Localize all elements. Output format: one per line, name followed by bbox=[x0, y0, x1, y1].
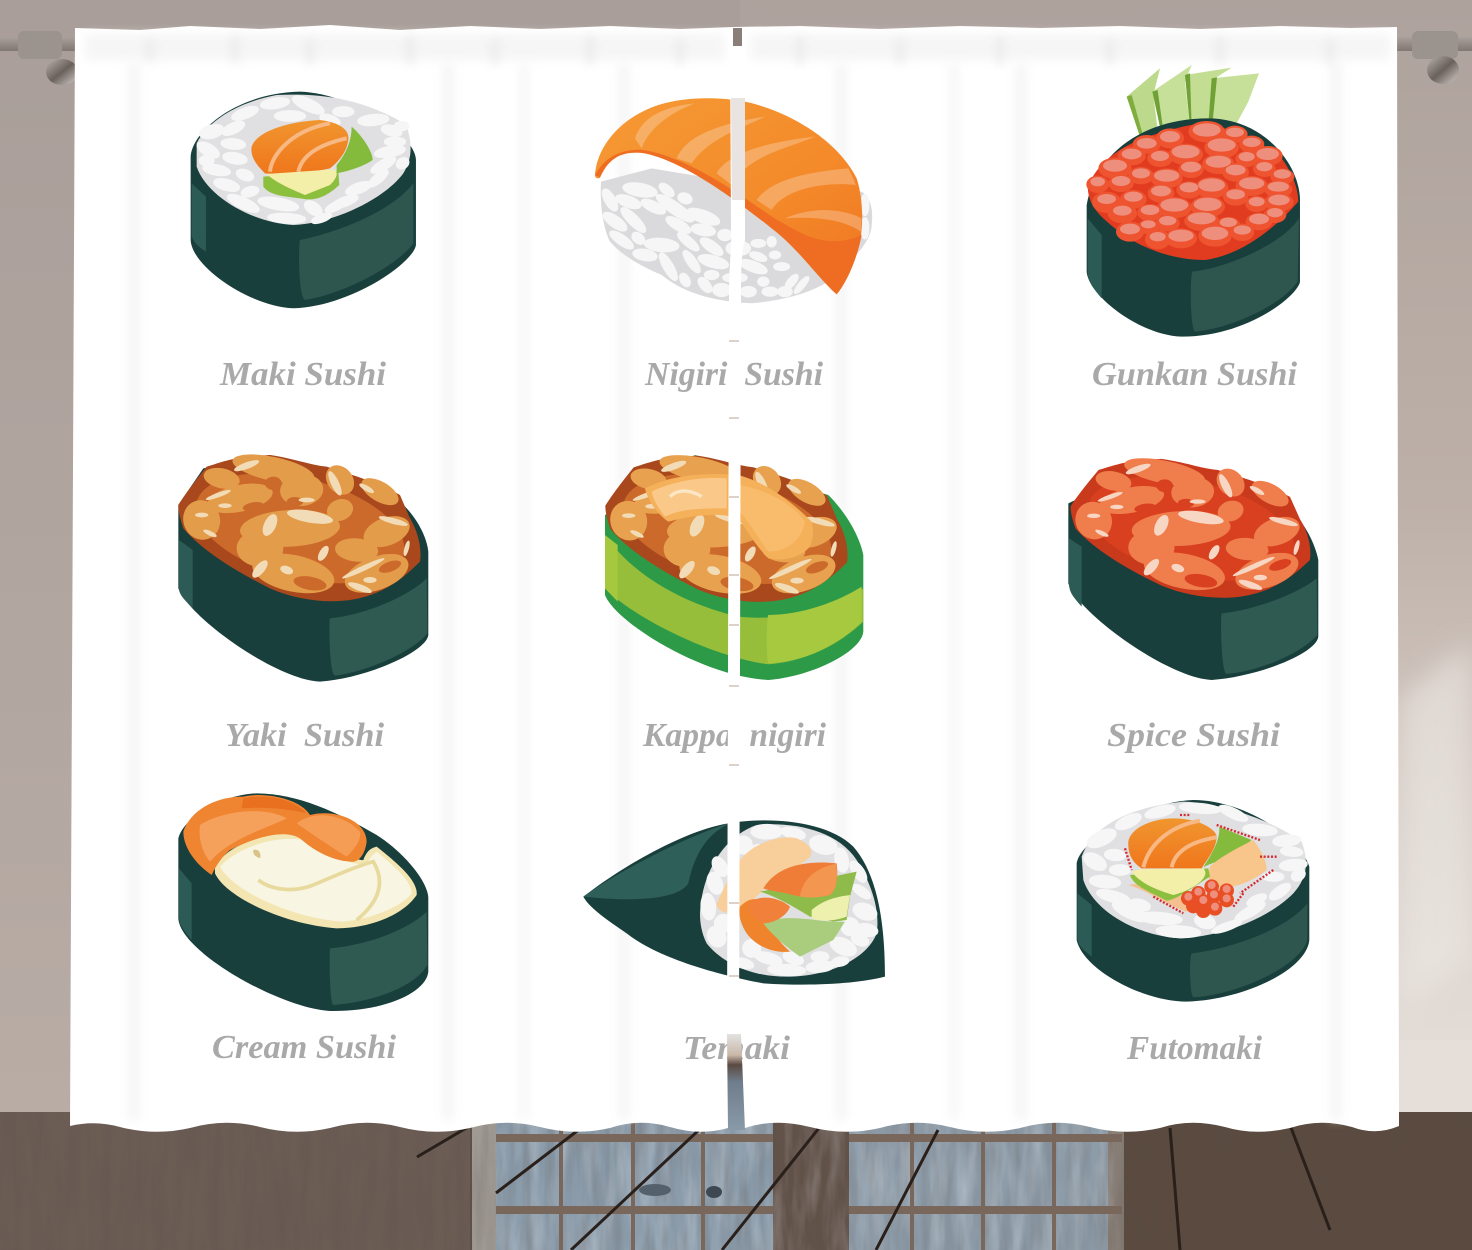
yaki sushi label: Yaki Sushi bbox=[225, 717, 385, 754]
spice topping bbox=[1070, 453, 1310, 599]
cream filling bbox=[215, 834, 417, 928]
gunkan sushi label: Gunkan Sushi bbox=[1092, 356, 1298, 393]
gunkan sushi bbox=[1086, 65, 1300, 337]
maki fillings bbox=[251, 120, 373, 199]
kappa topping bbox=[605, 449, 848, 603]
kappa nigiri bbox=[605, 449, 863, 680]
salmon roe bbox=[1086, 121, 1298, 260]
cream sushi bbox=[178, 793, 428, 1011]
temaki fillings bbox=[717, 837, 857, 957]
temaki bbox=[583, 820, 885, 985]
futomaki bbox=[1077, 800, 1309, 1002]
futomaki label: Futomaki bbox=[1126, 1030, 1263, 1067]
cucumber garnish bbox=[1127, 65, 1259, 137]
maki sushi bbox=[191, 92, 416, 308]
kappa nigiri label: Kappa nigiri bbox=[642, 717, 827, 754]
spice sushi bbox=[1068, 453, 1318, 680]
sea urchin centre bbox=[645, 474, 813, 559]
left curtain rod bbox=[0, 31, 78, 85]
salmon topping bbox=[595, 98, 862, 294]
spice sushi label: Spice Sushi bbox=[1107, 717, 1281, 754]
nigiri sushi bbox=[595, 98, 872, 303]
right curtain rod bbox=[1396, 31, 1472, 84]
curtain bbox=[70, 25, 1399, 1132]
cream sushi label: Cream Sushi bbox=[212, 1029, 397, 1066]
temaki label: Temaki bbox=[683, 1030, 791, 1067]
nigiri sushi label: Nigiri Sushi bbox=[644, 356, 824, 393]
yaki topping bbox=[178, 449, 421, 603]
curtain centre seam bbox=[727, 28, 745, 1130]
yaki sushi bbox=[178, 449, 428, 682]
maki sushi label: Maki Sushi bbox=[219, 356, 387, 393]
salmon pieces bbox=[183, 795, 367, 875]
futomaki fillings bbox=[1125, 815, 1277, 918]
wooden floor with window reflection bbox=[0, 1112, 1472, 1250]
